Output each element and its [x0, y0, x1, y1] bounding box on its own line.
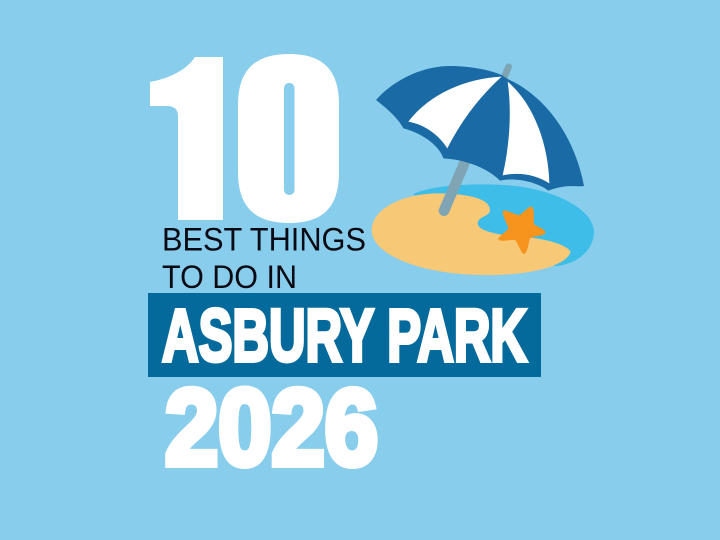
subtitle: best things to do in	[162, 222, 366, 295]
year 2026: 2026	[165, 366, 378, 488]
big number 10: 0	[231, 14, 340, 268]
icon: umbrella pole	[444, 67, 509, 211]
icon: umbrella white panel right	[503, 82, 549, 183]
big number 10	[150, 54, 339, 223]
icon: umbrella white panel left	[408, 77, 502, 148]
subtitle: best things to do in: BEST THINGS	[162, 222, 366, 258]
icon: beach umbrella on sand	[372, 66, 594, 275]
big number 10: 1	[141, 13, 265, 267]
icon: sand	[372, 193, 571, 275]
banner: Asbury Park: ASBURY PARK	[162, 294, 527, 377]
icon: water	[413, 184, 594, 266]
icon: starfish	[498, 207, 545, 254]
icon: umbrella canopy	[376, 66, 584, 191]
banner: Asbury Park	[148, 293, 541, 377]
subtitle: best things to do in: TO DO IN	[162, 259, 297, 295]
